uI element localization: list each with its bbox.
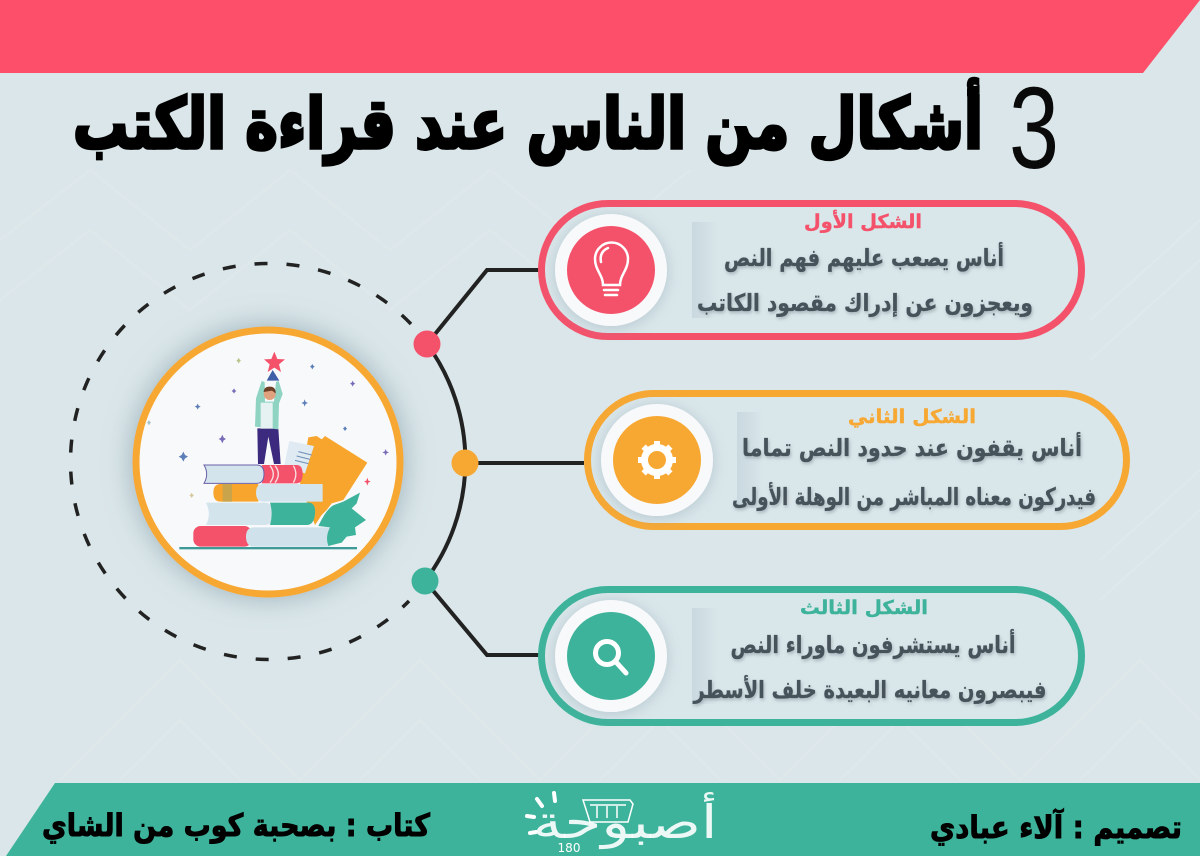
text: third form: فيبصرون معانيه البعيدة خلف الأسطر <box>693 675 1046 704</box>
connector: first form <box>414 270 540 358</box>
panel: third form <box>542 590 1082 722</box>
icon: gear <box>607 410 707 510</box>
footer band <box>6 783 1200 856</box>
connector: second form <box>452 450 584 476</box>
book credit: كتاب : بصحبة كوب من الشاي <box>42 808 431 844</box>
logo <box>527 792 718 855</box>
icon: leaf <box>318 493 366 546</box>
connector: third form <box>412 568 540 655</box>
icon: light bulb <box>561 220 661 320</box>
central illustration: person on books <box>136 330 400 594</box>
top red banner <box>0 0 1200 73</box>
heading: second form: الشكل الثاني <box>848 406 976 428</box>
panel: second form <box>588 394 1126 526</box>
sparkles <box>147 358 389 498</box>
logo: أصبوحة <box>532 792 718 850</box>
heading: third form: الشكل الثالث <box>800 597 928 619</box>
title text: أشكال من الناس عند قراءة الكتب <box>73 78 983 165</box>
central diagram: dashed ring and solid arc <box>71 263 465 659</box>
book stack <box>193 465 330 547</box>
title <box>73 63 1059 193</box>
text: second form: فيدركون معناه المباشر من الوهلة الأولى <box>732 482 1096 511</box>
text: third form <box>693 629 1046 704</box>
logo: 180 <box>558 841 580 855</box>
panel: first form <box>542 204 1082 336</box>
heading: first form: الشكل الأول <box>804 210 922 233</box>
text: first form <box>697 242 1033 317</box>
title numeral: 3 <box>1009 63 1059 193</box>
text: third form: أناس يستشرفون ماوراء النص <box>730 629 1016 659</box>
text: first form: أناس يصعب عليهم فهم النص <box>724 242 1004 272</box>
icon: paper sheet <box>284 441 314 473</box>
icon: magnifier <box>561 606 661 706</box>
text: second form: أناس يقفون عند حدود النص تماما <box>742 432 1082 462</box>
text: second form <box>732 432 1096 511</box>
icon: orange folder <box>300 436 367 525</box>
text: first form: ويعجزون عن إدراك مقصود الكاتب <box>697 289 1033 317</box>
figure: reader <box>255 352 285 464</box>
